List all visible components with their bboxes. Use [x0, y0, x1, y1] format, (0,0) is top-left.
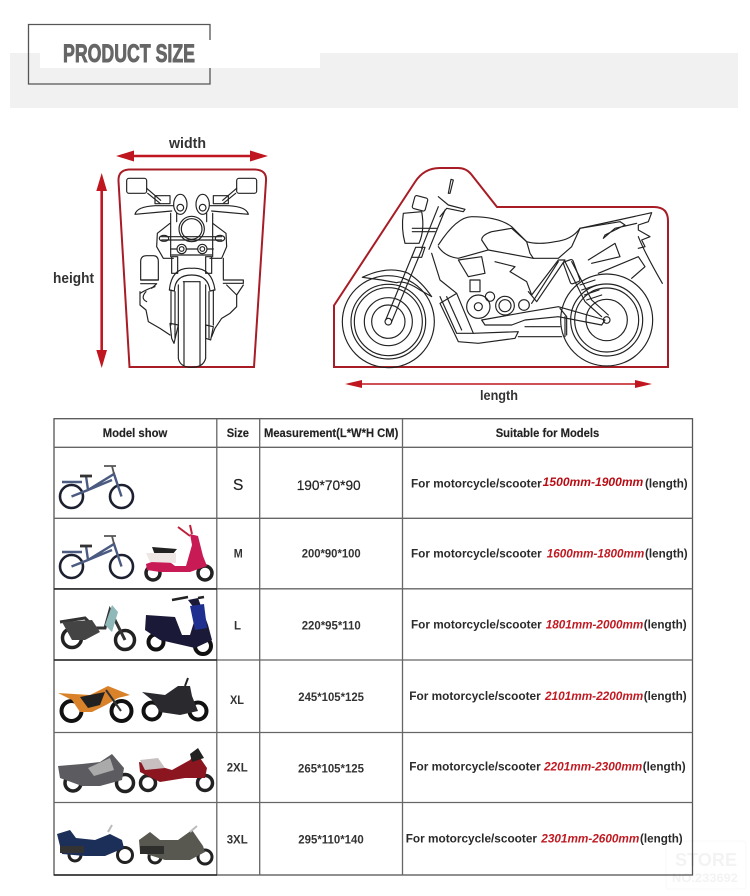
diagram: side view with length: [334, 168, 668, 403]
watermark: store number: STORE: [675, 850, 737, 870]
label: length: length: [480, 388, 518, 403]
row 2XL: 2201mm-2300mm: [543, 760, 643, 774]
row 3XL: 295*110*140: [298, 834, 364, 846]
row S: [60, 466, 688, 508]
row S: For motorcycle/scooter: [411, 476, 542, 490]
table header row: [103, 428, 599, 440]
arrow: length: [345, 380, 652, 388]
label: height: height: [53, 271, 94, 287]
row L: For motorcycle/scooter: [411, 617, 542, 631]
row XL: 2101mm-2200mm: [544, 689, 644, 703]
row XL: For motorcycle/scooter: [409, 689, 541, 703]
arrow: width: [116, 150, 268, 162]
table header row: Size: [227, 428, 249, 440]
row M: 200*90*100: [302, 549, 361, 561]
image: bicycle and pink scooter: [60, 525, 212, 580]
front wheel: [342, 276, 434, 368]
motorcycle line drawing: front: [127, 178, 257, 367]
row S: (length): [645, 476, 688, 490]
row M: (length): [645, 546, 688, 560]
arrow: height: [96, 173, 107, 368]
row 2XL: (length): [643, 760, 686, 774]
row L: L: [234, 620, 241, 632]
row 3XL: 2301mm-2600mm: [540, 831, 640, 845]
row 2XL: 2XL: [227, 763, 248, 775]
image: bicycle: [60, 466, 133, 508]
row 3XL: [57, 825, 683, 864]
table header row: Measurement(L*W*H CM): [264, 428, 398, 440]
row M: For motorcycle/scooter: [411, 546, 542, 560]
image: orange dirt bike and black naked bike: [58, 678, 206, 721]
image: blue cruiser and gold tourer: [57, 825, 212, 864]
rear wheel: [561, 274, 653, 366]
row S: 190*70*90: [297, 477, 361, 493]
watermark: store number: NO.233692: [672, 871, 738, 885]
table grid: [54, 419, 692, 875]
table header row: Suitable for Models: [496, 428, 599, 440]
row XL: [58, 678, 687, 721]
row 3XL: 3XL: [227, 834, 248, 846]
image: moped and blue scooter: [60, 597, 212, 654]
row S: 1500mm-1900mm: [543, 475, 644, 489]
cover outline: side: [334, 168, 668, 367]
title: PRODUCT SIZE: [63, 40, 195, 68]
row 3XL: For motorcycle/scooter: [406, 831, 537, 845]
watermark: store number: [666, 841, 746, 889]
row L: 220*95*110: [302, 620, 361, 632]
row XL: XL: [230, 695, 244, 707]
size table: [54, 419, 692, 875]
row XL: 245*105*125: [298, 692, 365, 704]
row L: [60, 597, 687, 654]
header band: product size: [10, 24, 738, 108]
row 2XL: 265*105*125: [298, 763, 365, 775]
cover outline: front: [118, 170, 266, 367]
image: silver tourer and red maxi scooter: [58, 748, 212, 792]
table header row: Model show: [103, 428, 167, 440]
row 2XL: [58, 748, 686, 792]
row M: [60, 525, 688, 580]
row L: 1801mm-2000mm: [546, 617, 644, 631]
motorcycle line drawing: side: [342, 179, 662, 368]
row 3XL: (length): [640, 831, 683, 845]
row M: M: [234, 549, 243, 561]
diagram: front view with width and height: [53, 136, 268, 368]
row XL: (length): [644, 689, 687, 703]
row S: S: [233, 477, 243, 494]
row L: (length): [644, 617, 687, 631]
label: width: width: [168, 136, 206, 152]
row M: 1600mm-1800mm: [547, 546, 645, 560]
row 2XL: For motorcycle/scooter: [409, 760, 541, 774]
